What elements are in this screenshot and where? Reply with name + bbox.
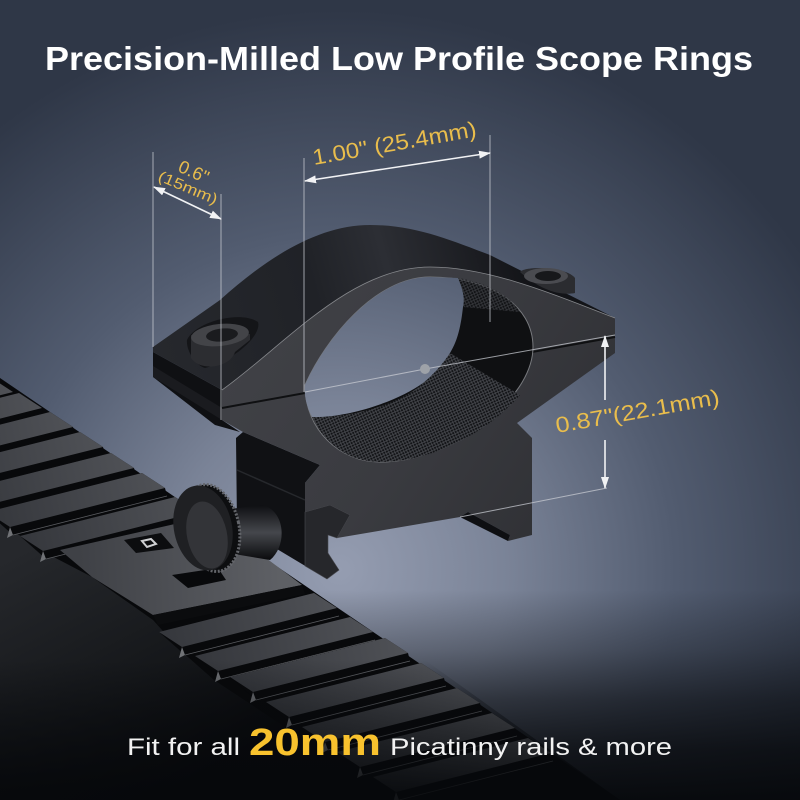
flat section front wall (153, 585, 305, 625)
scope ring (153, 225, 615, 579)
rail teeth, upper section (0, 377, 200, 562)
rail flat section (60, 516, 302, 615)
bottom dark fade (0, 590, 800, 800)
front foot (305, 505, 350, 579)
rail lower body (0, 522, 380, 800)
center dot (420, 364, 430, 374)
title: Precision-Milled Low Profile Scope Rings (45, 40, 753, 77)
footer lead: Fit for all (127, 734, 240, 761)
left face lower lip (153, 366, 222, 420)
ring front face (222, 267, 615, 541)
label: 0.6 inch: 0.6" (175, 156, 212, 187)
extension lines (153, 135, 615, 517)
base clamp side (236, 432, 339, 579)
ring split line (222, 337, 615, 408)
knob face (166, 480, 240, 576)
footer tail: Picatinny rails & more (390, 734, 672, 761)
height arrow lower (604, 440, 606, 488)
height arrow upper (604, 336, 606, 400)
knurled inner surface (312, 353, 520, 462)
label: height: 0.87"(22.1mm) (554, 384, 721, 438)
dimension lines (153, 135, 615, 517)
bore arrow (305, 153, 490, 181)
rail darkening toward bottom (0, 660, 620, 800)
right bolt (520, 268, 575, 294)
clamp groove (237, 470, 305, 500)
bore interior (305, 277, 533, 462)
lower left face (153, 352, 240, 432)
footer highlight: 20mm (249, 722, 381, 764)
thumb screw knob (166, 479, 282, 577)
knurled upper patch (458, 278, 520, 312)
rail teeth, lower section (159, 593, 553, 800)
label: 15mm: (15mm) (155, 168, 220, 208)
knob dome (180, 498, 234, 572)
footer text (127, 722, 672, 764)
knurled wheel (174, 479, 248, 577)
upper band (153, 225, 615, 390)
width arrow (154, 187, 221, 219)
label: bore diameter: 1.00" (25.4mm) (311, 116, 478, 170)
far rail channel (460, 512, 510, 541)
knob shaft (222, 505, 282, 560)
hex marker (124, 533, 174, 553)
picatinny rail (0, 377, 620, 800)
rail slot (172, 568, 226, 588)
see-through opening (305, 277, 464, 417)
arch rim highlight (222, 267, 615, 390)
left bolt (187, 317, 258, 368)
